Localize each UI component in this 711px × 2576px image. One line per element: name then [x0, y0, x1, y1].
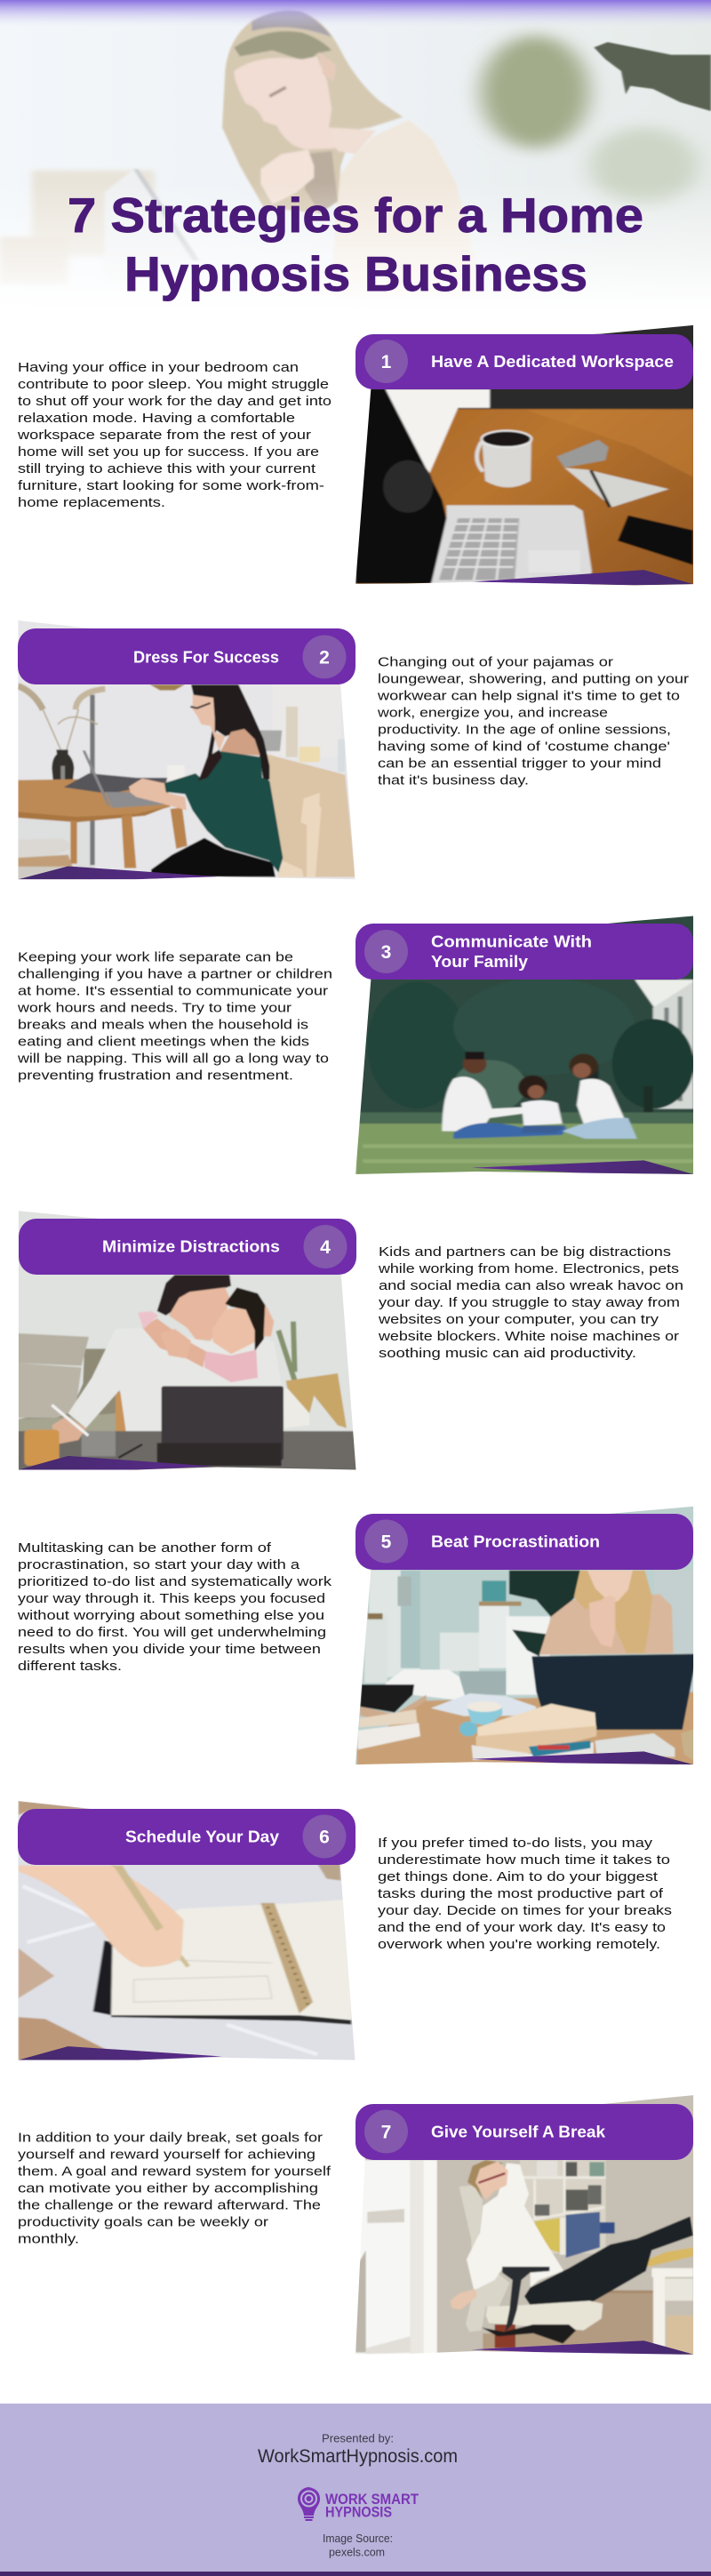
photo: woman pondering behind laptop and books — [356, 1506, 693, 1765]
number badge — [364, 340, 408, 383]
section 4 text: Kids and partners can be big distractions — [379, 1244, 671, 1260]
section 3 text: Keeping your work life separate can be — [18, 949, 293, 965]
title — [68, 188, 643, 301]
section 4 text: soothing music can aid productivity. — [379, 1346, 636, 1361]
section 5 text: Multitasking can be another form of — [18, 1540, 272, 1556]
section 1 text: furniture, start looking for some work-from- — [18, 478, 324, 493]
panel: step 6: 6 — [319, 1828, 330, 1847]
heading pill — [356, 334, 693, 389]
panel: step 7 — [354, 2093, 699, 2360]
section 1 text: to shut off your work for the day and get into — [18, 394, 332, 409]
logo: work smart hypnosis — [298, 2487, 419, 2521]
section 3 text: eating and client meetings when the kids — [18, 1035, 309, 1049]
section 6 text: and the end of your work day. It's easy to — [378, 1920, 666, 1935]
section 7 text: monthly. — [18, 2231, 79, 2247]
heading text — [431, 932, 592, 971]
section 5 text: results when you divide your time between — [18, 1642, 321, 1657]
heading text: Give Yourself A Break — [431, 2123, 606, 2140]
section 7 text: productivity goals can be weekly or — [18, 2215, 268, 2229]
section 5 text: need to do first. You will get underwhelming — [18, 1625, 326, 1640]
photo: laptop and coffee on wooden desk — [356, 320, 700, 589]
heading pill — [356, 2104, 693, 2160]
section 5 text: procrastination, so start your day with a — [18, 1557, 300, 1572]
panel: step 5 — [356, 1506, 693, 1765]
photo: woman in green sweater at laptop — [16, 618, 362, 884]
panel: step 5: 5 — [381, 1532, 392, 1552]
panel: footer — [0, 2404, 711, 2576]
section 2 text: can be an essential trigger to your mind — [378, 756, 661, 772]
section 2 text — [377, 654, 689, 788]
section 3 text: challenging if you have a partner or children — [18, 967, 332, 981]
section 5 text: your way through it. This keeps you focused — [18, 1591, 325, 1606]
panel: step 1 — [356, 320, 700, 589]
photo: family sitting on grass — [356, 914, 700, 1176]
logo: work smart hypnosis: WORK SMART — [325, 2491, 419, 2508]
section 3 text: will be napping. This will all go a long way to — [17, 1051, 329, 1067]
section 1 text: relaxation mode. Having a comfortable — [18, 411, 295, 426]
heading pill — [356, 1514, 693, 1570]
section 4 text: while working from home. Electronics, pets — [378, 1261, 679, 1276]
section 7 text: yourself and reward yourself for achieving — [18, 2148, 316, 2162]
website name: WorkSmartHypnosis.com — [258, 2446, 458, 2467]
section 6 text: get things done. Aim to do your biggest — [378, 1869, 659, 1884]
section 7 text: can motivate you either by accomplishing — [18, 2181, 318, 2196]
section 2 text: loungewear, showering, and putting on your — [378, 672, 689, 686]
panel: step 7: 7 — [381, 2123, 391, 2142]
section 5 text: prioritized to-do list and systematically work — [18, 1574, 332, 1589]
panel: step 3: 3 — [381, 942, 391, 963]
heading text: Dress For Success — [133, 647, 279, 667]
photo: mother hugged by child at laptop — [16, 1209, 362, 1476]
number badge — [302, 635, 347, 679]
number badge — [364, 1520, 408, 1563]
panel: step 4 — [16, 1209, 362, 1476]
photo: woman stretching in office chair — [354, 2093, 699, 2360]
section 6 text: overwork when you're working remotely. — [378, 1937, 660, 1952]
section 3 text: work hours and needs. Try to time your — [17, 1001, 292, 1015]
section 1 text: still trying to achieve this with your current — [18, 461, 316, 476]
presented by label: Presented by: — [322, 2432, 394, 2444]
panel: step 1: 1 — [381, 352, 392, 372]
image source site: pexels.com — [329, 2546, 385, 2558]
panel: step 3 — [356, 914, 700, 1176]
image source label: Image Source: — [323, 2532, 393, 2545]
section 6 text — [378, 1836, 672, 1952]
section 5 text: without worrying about something else you — [17, 1608, 324, 1623]
panel: step 4: 4 — [320, 1237, 331, 1258]
section 2 text: that it's business day. — [378, 773, 529, 788]
section 5 text — [17, 1540, 332, 1674]
section 6 text: your day. Decide on times for your breaks — [378, 1903, 672, 1918]
section 7 text: In addition to your daily break, set goals for — [18, 2130, 323, 2146]
panel: step 6 — [13, 1796, 363, 2066]
section 6 text: tasks during the most productive part of — [378, 1886, 664, 1901]
section 5 text: different tasks. — [18, 1659, 122, 1674]
section 7 text — [18, 2130, 332, 2247]
heading text: Minimize Distractions — [102, 1237, 280, 1255]
hero photo: woman thinking at laptop — [0, 9, 711, 283]
section 1 text: contribute to poor sleep. You might struggle — [18, 377, 329, 392]
section 2 text: productivity. In the age of online sessions, — [378, 722, 671, 738]
section 4 text: website blockers. White noise machines or — [378, 1329, 679, 1344]
heading text: Schedule Your Day — [125, 1828, 280, 1845]
section 1 text — [17, 360, 332, 510]
section 6 text: underestimate how much time it takes to — [378, 1852, 670, 1868]
section 4 text — [378, 1244, 683, 1361]
heading text: Beat Procrastination — [431, 1532, 600, 1550]
photo: hand writing in spiral planner — [13, 1796, 363, 2066]
icon: spiral lightbulb — [298, 2487, 320, 2521]
section 4 text: websites on your computer, you can try — [378, 1312, 659, 1327]
panel: step 2: 2 — [319, 647, 330, 668]
section 1 text: home replacements. — [18, 495, 165, 510]
section 1 text: home will set you up for success. If you are — [18, 444, 319, 460]
section 2 text: Changing out of your pajamas or — [378, 654, 613, 670]
section 3 text: preventing frustration and resentment. — [18, 1068, 293, 1083]
number badge — [364, 2110, 408, 2153]
title: Hypnosis Business — [124, 246, 587, 301]
heading pill — [19, 1219, 356, 1275]
section 1 text: Having your office in your bedroom can — [18, 360, 299, 375]
heading text: Have A Dedicated Workspace — [431, 352, 674, 371]
heading pill — [356, 924, 693, 980]
number badge — [304, 1225, 347, 1268]
section 2 text: workwear can help signal it's time to get to — [377, 688, 680, 704]
logo: work smart hypnosis: HYPNOSIS — [325, 2503, 392, 2521]
number badge — [364, 930, 408, 973]
section 7 text: the challenge or the reward afterward. The — [18, 2197, 321, 2213]
section 6 text: If you prefer timed to-do lists, you may — [378, 1836, 653, 1851]
section 3 text — [17, 949, 332, 1083]
section 1 text: workspace separate from the rest of your — [17, 428, 311, 443]
section 2 text: having some of kind of 'costume change' — [378, 740, 670, 754]
heading text: Your Family — [431, 952, 529, 971]
section 4 text: your day. If you struggle to stay away from — [379, 1295, 680, 1310]
section 3 text: at home. It's essential to communicate your — [18, 983, 328, 999]
panel: step 2 — [16, 618, 362, 884]
number badge — [302, 1815, 347, 1858]
section 7 text: them. A goal and reward system for yourself — [18, 2164, 332, 2180]
section 2 text: work, energize you, and increase — [377, 706, 608, 720]
top purple glow — [0, 0, 711, 27]
title: 7 Strategies for a Home — [68, 188, 643, 243]
section 3 text: breaks and meals when the household is — [18, 1017, 308, 1033]
heading pill — [18, 1809, 356, 1865]
section 4 text: and social media can also wreak havoc on — [379, 1278, 683, 1293]
heading pill — [18, 628, 356, 684]
heading text: Communicate With — [431, 932, 592, 951]
